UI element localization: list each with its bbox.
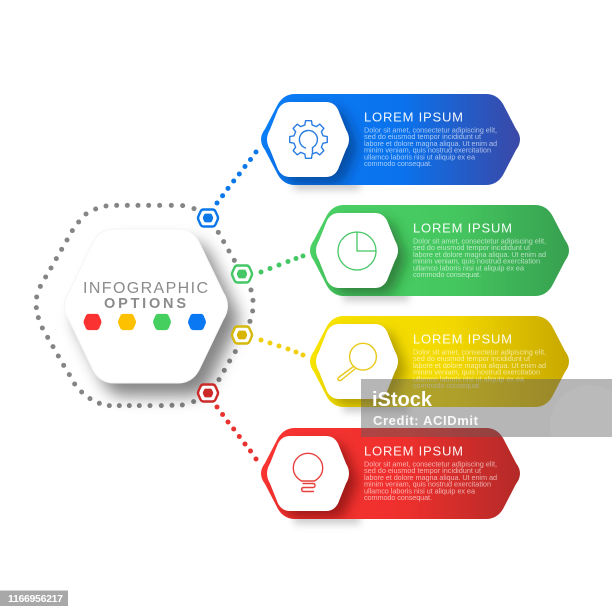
text block: option 3: ullamco laboris nisi ut aliquip ex ea xyxy=(413,374,525,383)
text block: option 4: ullamco laboris nisi ut aliquip ex ea xyxy=(364,486,476,495)
heading: option 4: LOREM IPSUM xyxy=(364,444,463,458)
text block: option 1: ullamco laboris nisi ut aliquip ex ea xyxy=(364,152,476,161)
icon: gear xyxy=(290,121,327,158)
panel: option 2 green xyxy=(310,205,569,301)
watermark: iStock credit: Credit: ACIDmit xyxy=(373,413,479,428)
node: yellow xyxy=(232,326,252,344)
heading: option 1: LOREM IPSUM xyxy=(364,110,463,124)
connector: green xyxy=(258,254,306,274)
dotted hexagon ring xyxy=(34,203,255,408)
text block: option 4: labore et dolore magna aliqua. Ut enim ad xyxy=(364,473,497,482)
panel: option 1 blue xyxy=(261,94,520,190)
icon: pie chart xyxy=(338,232,376,270)
text block: option 2: ullamco laboris nisi ut aliquip ex ea xyxy=(413,263,525,272)
text block: option 4: commodo consequat. xyxy=(364,493,432,502)
text block: option 2: sed do eiusmod tempor incididunt ut xyxy=(413,243,530,252)
node: green xyxy=(232,266,252,282)
legend: colour hexagons xyxy=(84,314,206,330)
text block: option 3: Dolor sit amet, consectetur adipiscing elit, xyxy=(413,348,546,356)
connector: blue xyxy=(214,150,258,206)
icon: light bulb xyxy=(293,453,323,492)
text block: option 3 xyxy=(413,348,546,390)
connector: red xyxy=(214,404,258,462)
heading: option 3: LOREM IPSUM xyxy=(413,332,512,346)
connector: yellow xyxy=(258,338,306,358)
text block: option 1: commodo consequat. xyxy=(364,159,432,168)
text block: option 4: minim veniam, quis nostrud exercitation xyxy=(364,480,491,489)
text block: option 2: minim veniam, quis nostrud exercitation xyxy=(413,257,540,266)
text block: option 3: sed do eiusmod tempor incididunt ut xyxy=(413,354,530,363)
text block: option 1: minim veniam, quis nostrud exercitation xyxy=(364,146,491,155)
heading: infographic: INFOGRAPHIC xyxy=(83,280,208,297)
text block: option 2: Dolor sit amet, consectetur adipiscing elit, xyxy=(413,236,546,246)
image id tag: 1166956217 xyxy=(8,593,63,605)
watermark: iStock credit: iStock xyxy=(372,389,433,411)
text block: option 4: Dolor sit amet, consectetur adipiscing elit, xyxy=(364,460,497,468)
icon: magnifying glass xyxy=(338,343,376,381)
text block: option 2: commodo consequat. xyxy=(413,270,481,279)
panel: option 4 red xyxy=(261,428,520,524)
heading: option 2: LOREM IPSUM xyxy=(413,220,512,236)
text block: option 2: labore et dolore magna aliqua. Ut enim ad xyxy=(413,250,546,259)
text block: option 1: Dolor sit amet, consectetur adipiscing elit, xyxy=(364,126,497,134)
heading: options: OPTIONS xyxy=(104,296,186,312)
text block: option 3: commodo consequat. xyxy=(413,381,481,390)
node: red xyxy=(198,384,218,402)
panel: central hexagon xyxy=(64,229,238,396)
text block: option 4 xyxy=(364,460,497,502)
text block: option 1: sed do eiusmod tempor incididunt ut xyxy=(364,132,481,141)
text block: option 3: labore et dolore magna aliqua. Ut enim ad xyxy=(413,361,546,370)
panel: option 3 yellow xyxy=(310,316,569,412)
node: blue xyxy=(198,210,218,226)
text block: option 1 xyxy=(364,126,497,168)
text block: option 3: minim veniam, quis nostrud exercitation xyxy=(413,368,540,377)
watermark: iStock credit xyxy=(361,379,612,465)
text block: option 1: labore et dolore magna aliqua. Ut enim ad xyxy=(364,139,497,148)
image id tag xyxy=(0,590,68,606)
text block: option 4: sed do eiusmod tempor incididunt ut xyxy=(364,466,481,475)
text block: option 2 xyxy=(413,236,546,279)
